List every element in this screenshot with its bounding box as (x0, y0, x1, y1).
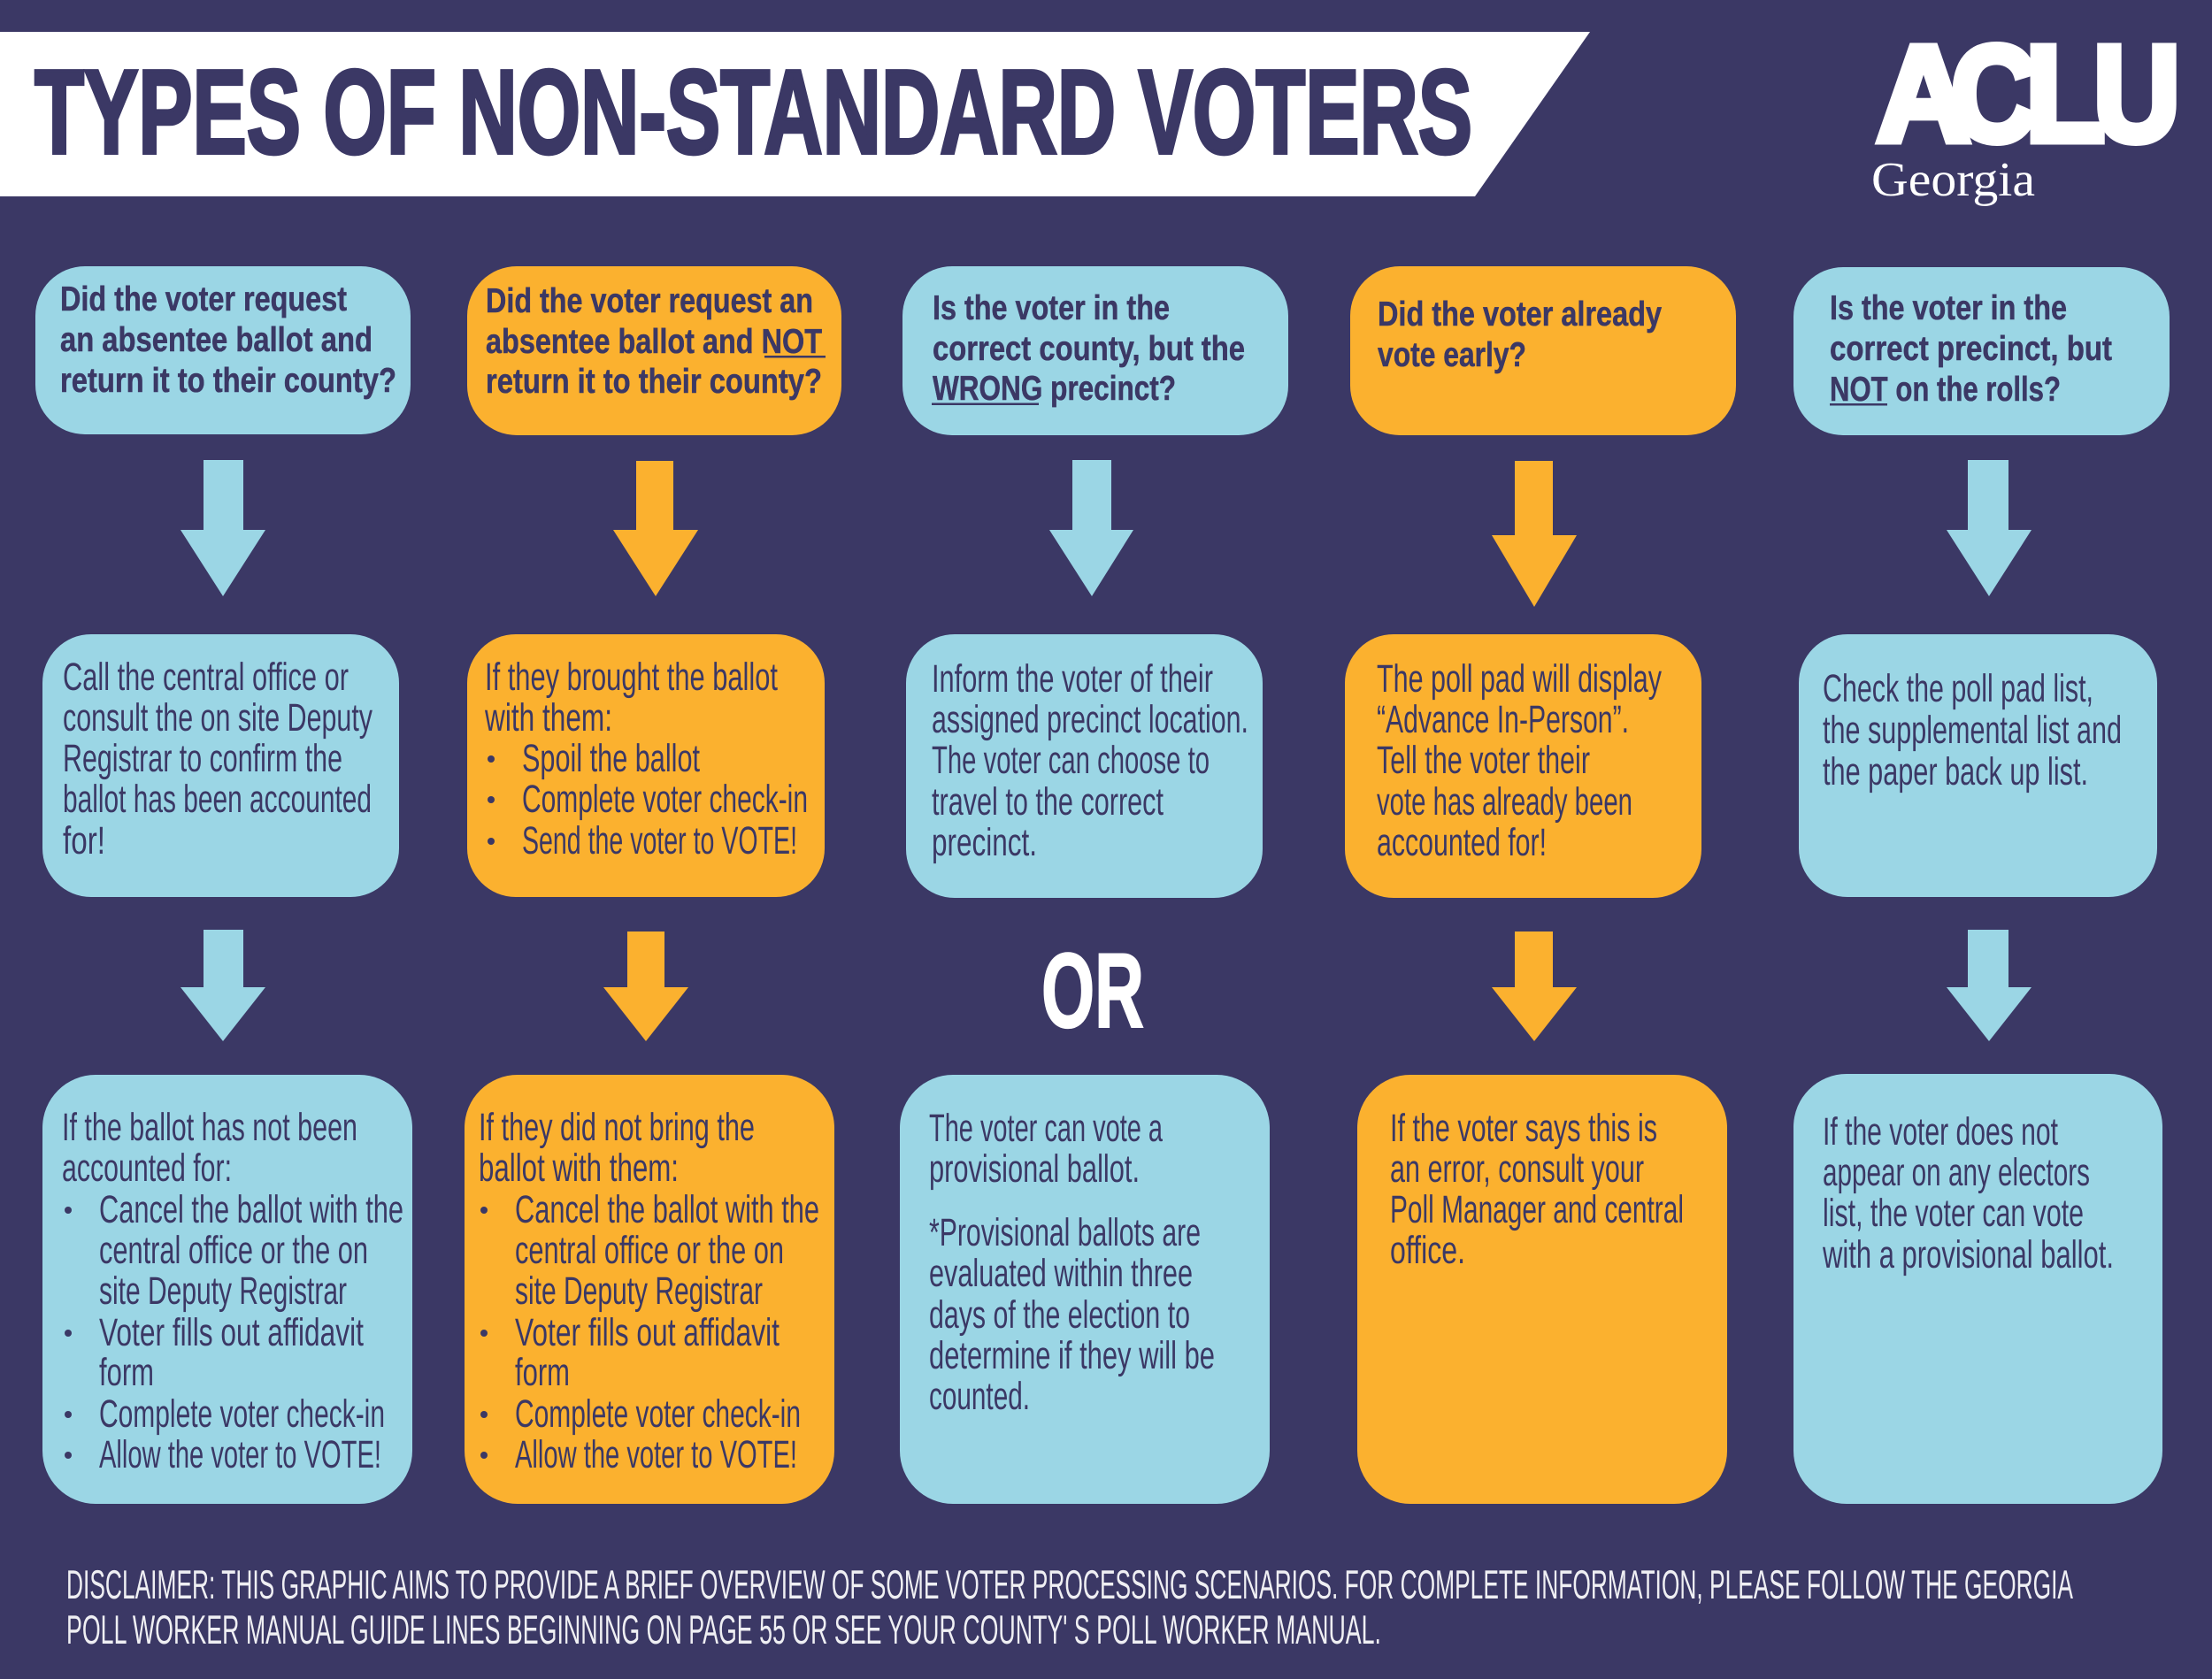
panel: question 2: return it to their county? (486, 363, 822, 401)
panel: step 4: accounted for! (1377, 821, 1547, 864)
panel: question 3 (902, 266, 1288, 435)
panel: outcome 4: Poll Manager and central (1390, 1188, 1684, 1231)
panel: step 3: Inform the voter of their (932, 657, 1213, 701)
logo: ACLU Georgia (1871, 18, 2180, 206)
panel: step 2: Complete voter check-in (522, 778, 808, 821)
panel: step 4: Tell the voter their (1377, 739, 1590, 782)
panel: outcome 3: counted. (929, 1375, 1030, 1418)
panel: outcome 3: determine if they will be (929, 1334, 1215, 1377)
panel: outcome 1: Cancel the ballot with the (99, 1188, 403, 1231)
panel: step 3: precinct. (932, 821, 1037, 864)
column 1: absentee returned (35, 266, 412, 1504)
panel: question 1 (35, 266, 411, 434)
panel: step 1 (42, 634, 399, 897)
panel: outcome 4: office. (1390, 1229, 1465, 1272)
panel: step 4 (1345, 634, 1701, 898)
panel: question 1: an absentee ballot and (60, 321, 373, 359)
panel: step 3: travel to the correct (932, 780, 1164, 824)
panel: outcome 2: Allow the voter to VOTE! (515, 1433, 797, 1476)
panel: question 2 (467, 266, 841, 435)
panel: question 5: correct precinct, but (1830, 330, 2112, 368)
panel: step 4: The poll pad will display (1377, 657, 1662, 701)
panel: outcome 1: form (99, 1351, 154, 1394)
panel: outcome 2: ballot with them: (479, 1146, 679, 1190)
panel: step 2: Send the voter to VOTE! (522, 819, 797, 862)
arrow: question 1 down (180, 460, 265, 596)
arrow: question 2 down (613, 461, 698, 596)
panel: outcome 3: evaluated within three (929, 1252, 1193, 1295)
panel: question 4: Did the voter already (1378, 295, 1662, 334)
panel: outcome 1: site Deputy Registrar (99, 1269, 347, 1313)
panel: outcome 2: central office or the on (515, 1229, 784, 1272)
panel: outcome 2: Complete voter check-in (515, 1392, 801, 1436)
panel: outcome 5: If the voter does not (1823, 1110, 2058, 1154)
panel: outcome 1: Complete voter check-in (99, 1392, 385, 1436)
logo: ACLU Georgia: C (1951, 18, 2037, 170)
title banner (0, 32, 1590, 196)
panel: question 5 (1793, 267, 2170, 435)
panel: outcome 1: If the ballot has not been (62, 1106, 357, 1149)
panel: outcome 4: an error, consult your (1390, 1147, 1644, 1191)
panel: step 1: ballot has been accounted (63, 778, 372, 821)
panel: step 2: with them: (484, 696, 612, 740)
column 5: not on the rolls (1793, 267, 2170, 1504)
panel: outcome 2 (465, 1075, 834, 1504)
panel: outcome 5: list, the voter can vote (1823, 1192, 2084, 1235)
panel: question 1: Did the voter request (60, 280, 347, 318)
panel: step 2 (467, 634, 825, 897)
panel: step 4: vote has already been (1377, 780, 1632, 824)
arrow: question 5 down (1947, 460, 2032, 596)
title: TYPES OF NON-STANDARD VOTERS (35, 45, 1472, 179)
column 3: wrong precinct (900, 266, 1288, 1504)
panel: step 5: the paper back up list. (1823, 750, 2088, 794)
panel: outcome 1: central office or the on (99, 1229, 368, 1272)
panel: outcome 4: If the voter says this is (1390, 1107, 1657, 1150)
panel: outcome 3: provisional ballot. (929, 1147, 1140, 1191)
panel: outcome 4 (1357, 1075, 1727, 1504)
panel: outcome 2: Cancel the ballot with the (515, 1188, 819, 1231)
panel: step 1: Call the central office or (63, 656, 349, 699)
panel: question 2: Did the voter request an (486, 282, 813, 320)
panel: step 1: Registrar to confirm the (63, 737, 342, 780)
panel: question 2: absentee ballot and NOT (486, 323, 822, 361)
panel: outcome 1: accounted for: (62, 1146, 232, 1190)
panel: question 3: correct county, but the (933, 330, 1245, 368)
panel: outcome 2: Voter fills out affidavit (515, 1311, 780, 1354)
column 4: voted early (1345, 266, 1736, 1504)
panel: outcome 2: form (515, 1351, 570, 1394)
arrow: step 1 down (180, 930, 265, 1041)
panel: outcome 2: If they did not bring the (479, 1106, 755, 1149)
panel: question 3: Is the voter in the (933, 289, 1170, 327)
panel: step 3 (906, 634, 1263, 898)
panel: question 4 (1350, 266, 1736, 435)
panel: outcome 3: The voter can vote a (929, 1107, 1163, 1150)
label: OR: OR (1041, 932, 1144, 1050)
panel: step 3: The voter can choose to (932, 739, 1210, 782)
arrow: step 5 down (1947, 930, 2032, 1041)
panel: step 5 (1799, 634, 2157, 897)
panel: question 5: NOT on the rolls? (1830, 371, 2061, 409)
panel: step 1: for! (63, 819, 105, 862)
logo: ACLU Georgia: A (1877, 18, 1970, 170)
logo: ACLU Georgia: U (2093, 18, 2180, 170)
panel: outcome 3: *Provisional ballots are (929, 1211, 1201, 1254)
logo: ACLU Georgia: L (2025, 18, 2105, 170)
panel: step 3: assigned precinct location. (932, 698, 1248, 741)
panel: outcome 1: Allow the voter to VOTE! (99, 1433, 381, 1476)
logo: ACLU Georgia: Georgia (1871, 152, 2035, 206)
arrow: step 4 down (1492, 932, 1577, 1041)
panel: step 5: Check the poll pad list, (1823, 667, 2093, 710)
panel: step 2: Spoil the ballot (522, 737, 700, 780)
panel: outcome 2: site Deputy Registrar (515, 1269, 763, 1313)
panel: question 3: WRONG precinct? (933, 370, 1176, 408)
arrow: step 2 down (603, 932, 688, 1041)
disclaimer (66, 1561, 2073, 1652)
arrow: question 4 down (1492, 461, 1577, 607)
panel: step 1: consult the on site Deputy (63, 696, 373, 740)
panel: outcome 3: days of the election to (929, 1293, 1190, 1337)
column 2: absentee not returned (465, 266, 841, 1504)
panel: outcome 5: appear on any electors (1823, 1151, 2090, 1194)
panel: outcome 5 (1793, 1074, 2162, 1504)
panel: question 5: Is the voter in the (1830, 289, 2067, 327)
arrow: question 3 down (1049, 460, 1133, 596)
panel: step 2: If they brought the ballot (485, 656, 778, 699)
panel: outcome 1: Voter fills out affidavit (99, 1311, 364, 1354)
panel: outcome 3 (900, 1075, 1270, 1504)
panel: outcome 1 (42, 1075, 412, 1504)
panel: step 4: “Advance In-Person”. (1377, 698, 1629, 741)
panel: question 4: vote early? (1378, 336, 1526, 374)
panel: question 1: return it to their county? (60, 362, 396, 400)
